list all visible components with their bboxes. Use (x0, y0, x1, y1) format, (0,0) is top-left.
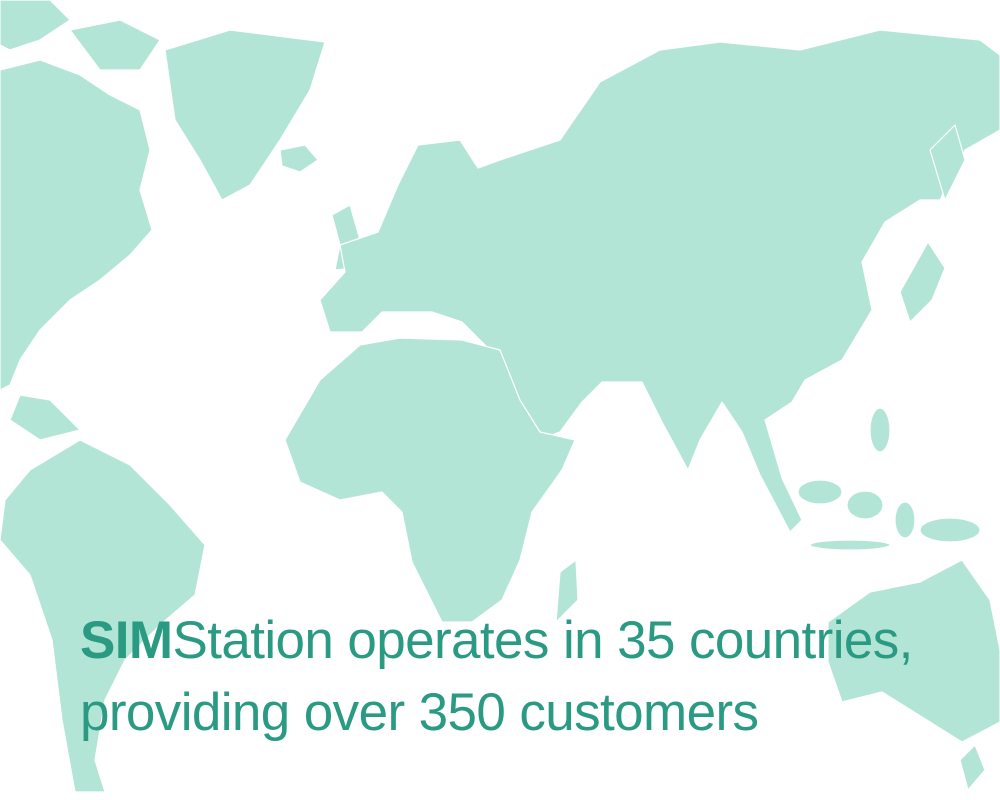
uk (332, 205, 360, 270)
north america (0, 0, 160, 440)
japan (900, 242, 945, 322)
headline text: SIMStation operates in 35 countries, (80, 611, 913, 670)
headline text (80, 611, 913, 742)
headline text: providing over 350 customers (80, 683, 758, 742)
africa (285, 338, 575, 622)
australia (828, 560, 1000, 742)
new zealand (960, 745, 985, 790)
madagascar (556, 560, 578, 622)
indonesia & philippines (798, 408, 980, 550)
greenland (165, 30, 325, 200)
iceland (280, 145, 318, 172)
eurasia (320, 30, 1000, 532)
south america (0, 440, 205, 792)
